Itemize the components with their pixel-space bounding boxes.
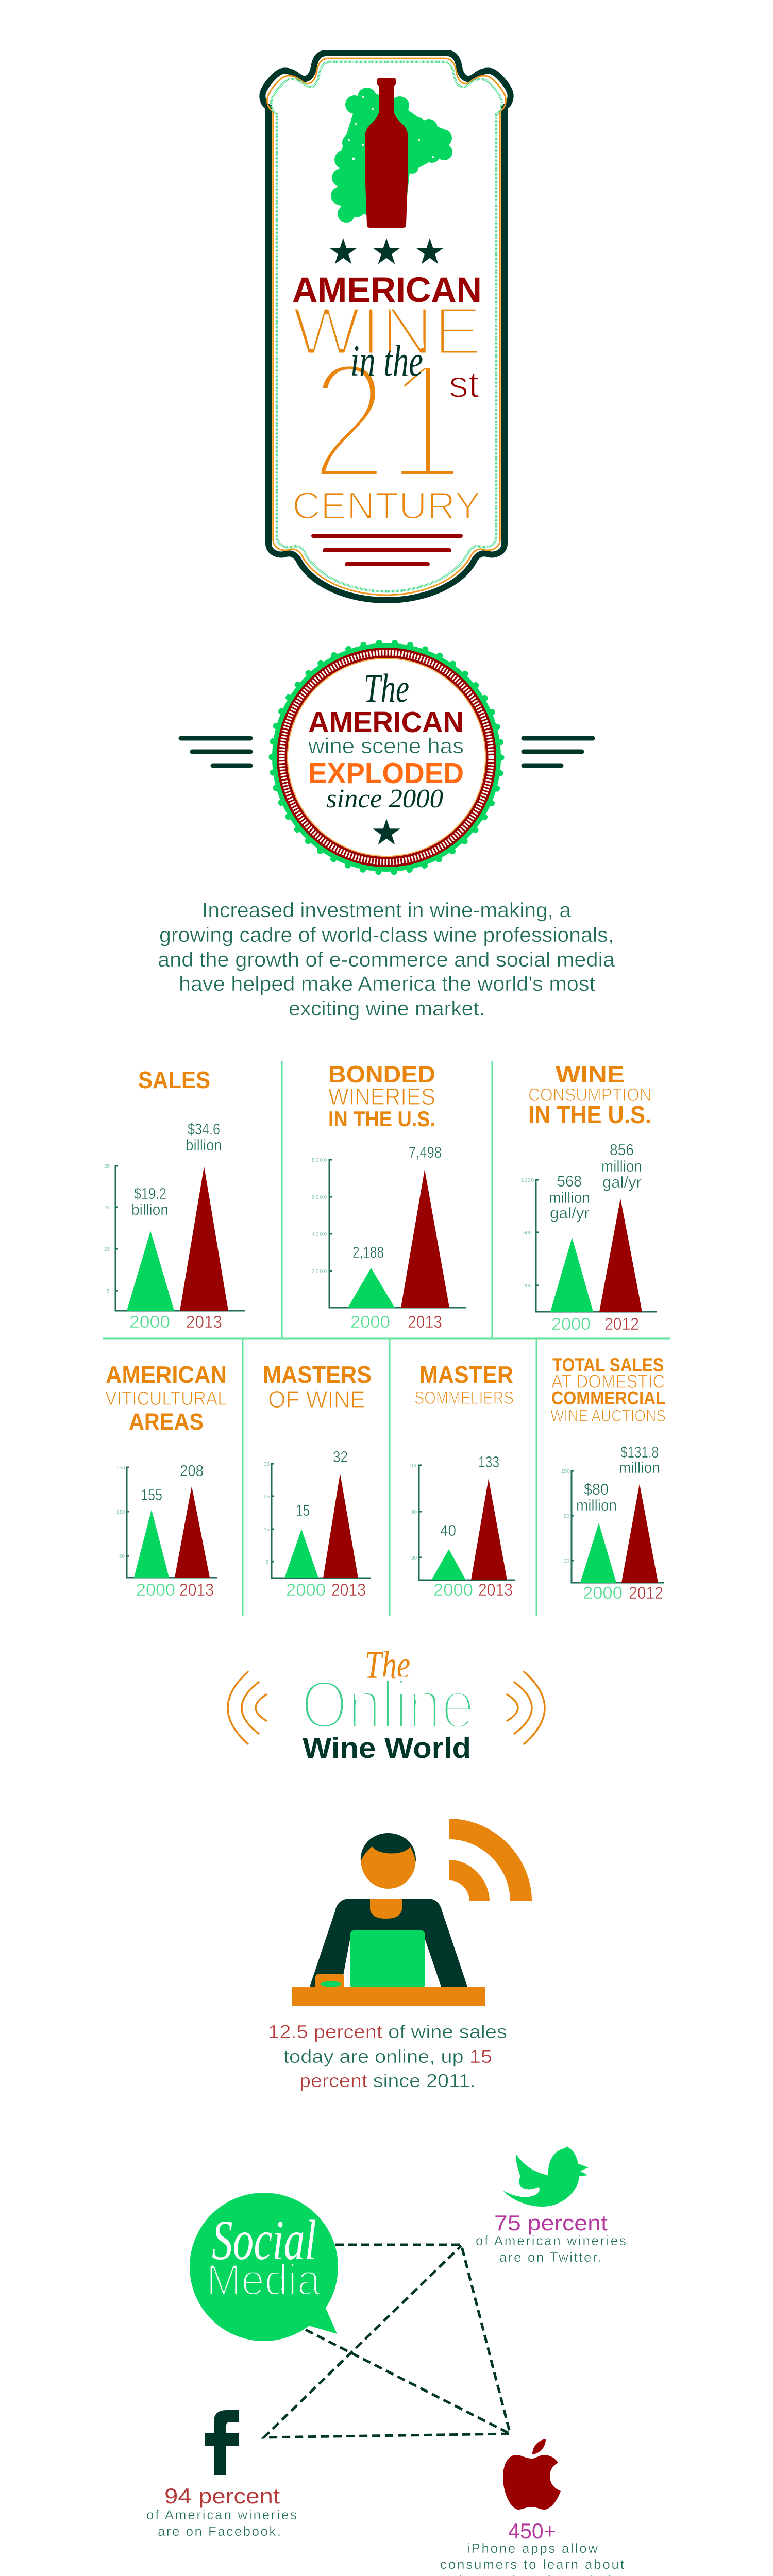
chart [521, 1141, 657, 1333]
title text: in the [350, 336, 423, 385]
heading [550, 1354, 666, 1425]
title label frame [262, 53, 511, 600]
heading text: Wine World [303, 1732, 471, 1765]
title text: WINE [292, 293, 482, 369]
star [373, 819, 400, 845]
heading: MASTER [419, 1361, 513, 1388]
chart: 2013 [186, 1312, 222, 1331]
twitter stat: are on Twitter. [499, 2249, 601, 2265]
heading: WINE AUCTIONS [550, 1406, 666, 1425]
online sales text: percent since 2011. [299, 2070, 476, 2091]
chart: 90 [411, 1510, 417, 1515]
wifi icon [449, 1819, 532, 1901]
chart: 8000 [312, 1158, 327, 1163]
twitter stat: of American wineries [476, 2233, 626, 2248]
online sales text [268, 2021, 507, 2091]
chart: 2013 [478, 1580, 513, 1599]
chart: 200 [523, 1283, 532, 1289]
chart [104, 1120, 245, 1331]
chart [264, 1448, 371, 1599]
chart: 35 [264, 1462, 270, 1467]
heading: AT DOMESTIC [551, 1371, 665, 1392]
dashed connectors [264, 2245, 510, 2437]
chart: 2000 [129, 1312, 170, 1331]
section heading: the online wine world [228, 1643, 545, 1765]
chart: 2013 [331, 1580, 366, 1599]
icon: facebook [205, 2410, 239, 2475]
panel: american viticultural areas [105, 1361, 227, 1599]
badge text [308, 666, 464, 814]
stars [329, 238, 444, 264]
chart: million [601, 1157, 642, 1175]
heading [414, 1361, 514, 1408]
social media speech bubble: Media [206, 2256, 321, 2304]
heading: MASTERS [263, 1361, 372, 1388]
panel: sales [104, 1066, 245, 1331]
iphone stat: 450+ [508, 2519, 556, 2543]
heading: WINERIES [328, 1083, 435, 1110]
chart: 2012 [604, 1314, 639, 1333]
iphone stat [440, 2519, 625, 2576]
chart: 30 [411, 1555, 417, 1561]
chart: 208 [180, 1462, 204, 1480]
chart: 150 [116, 1510, 125, 1515]
intro paragraph [158, 899, 615, 1020]
badge text: The [364, 666, 409, 710]
facebook stat: of American wineries [146, 2507, 297, 2522]
panel: wine consumption [521, 1061, 657, 1333]
heading: AREAS [129, 1409, 204, 1435]
chart: 2000 [433, 1580, 473, 1599]
badge text: AMERICAN [308, 706, 464, 739]
illustration: person at laptop with signal [292, 1819, 532, 2006]
chart: 2000 [350, 1312, 390, 1331]
heading: WINE [556, 1061, 625, 1088]
heading text: The [365, 1643, 410, 1687]
chart: 6000 [312, 1195, 327, 1200]
chart: 4000 [312, 1232, 327, 1238]
chart [561, 1443, 664, 1602]
social media speech bubble: Social [212, 2209, 316, 2272]
chart: 25 [104, 1205, 110, 1211]
chart: gal/yr [602, 1173, 642, 1191]
chart: 2000 [583, 1583, 623, 1602]
chart: $80 [584, 1480, 609, 1498]
heading [528, 1061, 651, 1129]
title text: CENTURY [292, 484, 481, 527]
chart: $34.6 [188, 1120, 220, 1138]
heading: VITICULTURAL [105, 1388, 227, 1410]
heading [105, 1361, 227, 1435]
heading text [301, 1643, 475, 1765]
frame border [262, 53, 511, 600]
chart: billion [131, 1200, 169, 1218]
facebook stat: 94 percent [164, 2484, 280, 2508]
heading: SOMMELIERS [414, 1388, 514, 1408]
heading: IN THE U.S. [328, 1107, 435, 1131]
chart: 2,188 [352, 1243, 384, 1261]
chart: 2000 [286, 1580, 326, 1599]
icon: twitter bird [503, 2146, 589, 2207]
intro paragraph: Increased investment in wine-making, a [202, 899, 572, 922]
signal arcs [228, 1672, 545, 1744]
panel: masters of wine [263, 1361, 372, 1599]
chart: 150 [561, 1469, 570, 1475]
badge: the American wine scene has exploded [181, 642, 593, 872]
facebook stat: are on Facebook. [158, 2523, 281, 2539]
heading: IN THE U.S. [528, 1101, 651, 1129]
intro paragraph: growing cadre of world-class wine professionals, [159, 924, 614, 946]
chart: 250 [116, 1465, 125, 1471]
chart [409, 1453, 515, 1599]
chart: 15 [296, 1501, 310, 1519]
chart: 7,498 [409, 1143, 442, 1161]
badge text: since 2000 [326, 784, 443, 814]
chart: 133 [478, 1453, 499, 1471]
online sales text: 12.5 percent of wine sales [268, 2021, 507, 2042]
chart: billion [186, 1136, 222, 1154]
intro paragraph: exciting wine market. [289, 997, 485, 1020]
chart: million [619, 1459, 660, 1477]
red rules [313, 536, 461, 564]
chart: 40 [440, 1521, 456, 1539]
chart: 90 [564, 1514, 570, 1519]
title text: 21 [311, 328, 464, 515]
chart: gal/yr [550, 1204, 590, 1222]
panel: master sommeliers [409, 1361, 515, 1599]
chart: 25 [264, 1494, 270, 1500]
heading: CONSUMPTION [528, 1085, 651, 1105]
twitter stat [476, 2211, 626, 2265]
heading: TOTAL SALES [552, 1354, 664, 1376]
chart: 600 [523, 1230, 532, 1236]
twitter stat: 75 percent [494, 2211, 608, 2235]
iphone stat: iPhone apps allow [467, 2540, 598, 2556]
chart: $19.2 [134, 1184, 166, 1202]
social media diagram [146, 2146, 626, 2576]
side rules [181, 738, 593, 766]
facebook stat [146, 2484, 297, 2539]
chart: 856 [610, 1141, 634, 1159]
chart: 2013 [408, 1312, 442, 1331]
chart: 2000 [136, 1580, 175, 1599]
icon: wine bottle [365, 78, 408, 228]
chart: million [576, 1496, 617, 1514]
heading: COMMERCIAL [551, 1387, 666, 1409]
social media speech bubble [190, 2193, 338, 2341]
online sales text: today are online, up 15 [283, 2046, 492, 2067]
intro paragraph: have helped make America the world's most [179, 973, 595, 995]
heading: OF WINE [268, 1386, 365, 1413]
chart: million [549, 1189, 590, 1207]
chart: 2000 [551, 1314, 591, 1333]
chart: 2013 [179, 1580, 214, 1599]
chart: 15 [264, 1527, 270, 1533]
icon: grapes [331, 88, 452, 223]
iphone stat: consumers to learn about [440, 2556, 625, 2572]
chart: 30 [564, 1558, 570, 1564]
icon: apple [503, 2439, 561, 2510]
badge text: EXPLODED [308, 757, 464, 790]
chart [312, 1143, 466, 1331]
intro paragraph: and the growth of e-commerce and social media [158, 948, 615, 971]
chart: 50 [119, 1554, 125, 1560]
panel: total sales at auction [550, 1354, 666, 1602]
badge seal [272, 642, 501, 872]
chart: 15 [104, 1247, 110, 1252]
title text: st [449, 364, 479, 405]
heading [328, 1061, 435, 1131]
chart: 155 [141, 1486, 162, 1504]
chart: 2012 [629, 1583, 663, 1602]
chart: 2000 [312, 1269, 327, 1275]
chart: 5 [266, 1560, 269, 1565]
person [292, 1833, 485, 2006]
heading: AMERICAN [106, 1361, 227, 1388]
chart: 1000 [521, 1178, 534, 1183]
panel: bonded wineries [312, 1061, 466, 1331]
title text [292, 270, 482, 527]
chart: 5 [107, 1289, 110, 1294]
chart: 150 [409, 1463, 418, 1469]
stats grid dividers [103, 1061, 670, 1616]
chart: $131.8 [620, 1443, 659, 1461]
chart: 35 [104, 1164, 110, 1170]
chart: 32 [333, 1448, 348, 1466]
chart: 568 [557, 1172, 582, 1190]
badge text: wine scene has [308, 734, 464, 758]
heading [263, 1361, 372, 1413]
chart [116, 1462, 217, 1599]
heading text: Online [301, 1667, 475, 1742]
heading: SALES [138, 1066, 210, 1093]
heading: BONDED [328, 1061, 435, 1088]
title text: AMERICAN [292, 270, 482, 310]
